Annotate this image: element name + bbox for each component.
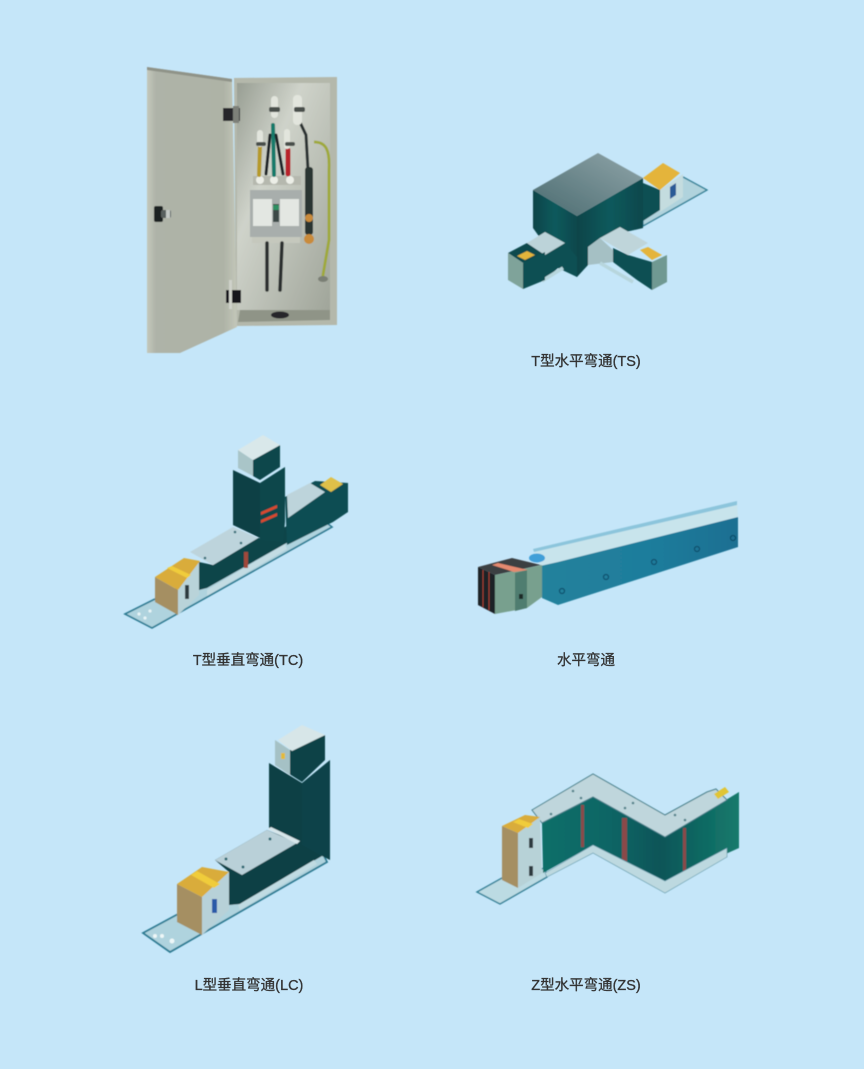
main housing — [199, 503, 333, 590]
lid screws — [204, 531, 242, 559]
right arm end — [652, 255, 667, 290]
caption: LC: L型垂直弯通(LC) — [195, 977, 303, 994]
cube left face — [533, 190, 577, 277]
left arm dark top — [508, 243, 545, 263]
left arm tray — [542, 268, 563, 281]
middle lid — [190, 527, 258, 565]
cabinet interior — [237, 83, 330, 310]
cabinet body — [234, 77, 337, 326]
right arm connector — [320, 477, 343, 492]
earth wire — [314, 142, 329, 280]
connector side — [495, 565, 542, 614]
right arm housing — [613, 248, 652, 290]
terminal bolts — [256, 107, 305, 146]
connector right face — [178, 562, 199, 615]
rear connector housing — [643, 183, 660, 221]
tower upper right — [253, 445, 280, 480]
tower upper left — [275, 740, 290, 775]
connector right face — [518, 817, 542, 888]
top lid — [532, 774, 727, 837]
connector top — [478, 558, 541, 575]
earth terminal — [318, 276, 328, 282]
cube top — [533, 153, 643, 216]
cable gland — [271, 312, 289, 318]
connector top — [502, 815, 540, 833]
product: horizontal elbow — [478, 501, 738, 614]
connector left face — [177, 884, 202, 935]
tower upper left — [238, 450, 253, 476]
housing strip — [207, 544, 287, 596]
cube right face — [577, 178, 643, 277]
tower left face — [233, 470, 260, 538]
connector left face — [502, 826, 518, 888]
tower upper right — [283, 735, 325, 782]
lid screws — [224, 838, 272, 868]
rear connector side — [660, 174, 683, 212]
right arm tray — [600, 263, 633, 282]
circuit breaker — [250, 176, 302, 243]
tower fins — [278, 725, 325, 751]
upper hinge — [223, 106, 240, 123]
teal face — [542, 792, 739, 881]
left arm housing — [545, 243, 577, 280]
tower red bands — [261, 505, 277, 523]
left tray — [477, 868, 547, 904]
left arm end — [508, 253, 523, 289]
left arm lid — [527, 232, 565, 255]
caption: TC: T型垂直弯通(TC) — [193, 652, 303, 669]
top face — [533, 502, 738, 566]
product: L-type vertical elbow — [143, 725, 330, 952]
connector left face — [155, 577, 178, 615]
tower right face — [302, 760, 330, 860]
tray holes — [137, 609, 152, 620]
clamps — [581, 805, 686, 873]
tower fins — [238, 435, 280, 460]
right arm — [285, 481, 348, 545]
bottom tray strip — [545, 845, 727, 893]
cable lugs — [257, 95, 302, 149]
bottom tray — [143, 852, 327, 952]
caption: TS: T型水平弯通(TS) — [531, 353, 641, 370]
power cables — [259, 116, 308, 290]
housing strip — [238, 860, 317, 910]
panel: distribution cabinet photo — [147, 67, 337, 353]
rear tray — [643, 177, 707, 226]
tower right face — [260, 467, 285, 542]
grounding bar — [304, 167, 314, 244]
product: T-type horizontal elbow — [508, 153, 707, 290]
rear connector top — [643, 163, 680, 190]
bolts — [560, 536, 736, 594]
caption: ZS: Z型水平弯通(ZS) — [531, 977, 641, 994]
right arm lid — [287, 483, 325, 518]
clamp — [244, 552, 248, 568]
product: T-type vertical elbow — [125, 435, 348, 628]
right arm gray panel — [588, 238, 613, 265]
far end connector — [714, 787, 729, 799]
side face — [540, 517, 738, 605]
blue blob — [529, 554, 545, 562]
lid collar — [268, 827, 300, 844]
lid screws — [550, 790, 686, 821]
main housing — [215, 830, 322, 905]
door — [147, 67, 237, 353]
cabinet bottom lip — [238, 310, 330, 322]
lower hinge — [226, 280, 241, 309]
caption: horizontal elbow: 水平弯通 — [557, 652, 615, 669]
product: Z-type horizontal elbow — [477, 774, 739, 904]
bottom tray — [125, 520, 332, 628]
connector top — [177, 867, 229, 897]
connector right face — [202, 872, 229, 935]
right arm lid — [600, 227, 648, 255]
tower left face — [269, 763, 302, 846]
top edge — [533, 501, 737, 552]
connector end — [478, 567, 495, 614]
tray holes — [153, 934, 174, 944]
connector top — [155, 558, 200, 590]
lid — [215, 830, 297, 875]
door latch — [154, 206, 171, 222]
